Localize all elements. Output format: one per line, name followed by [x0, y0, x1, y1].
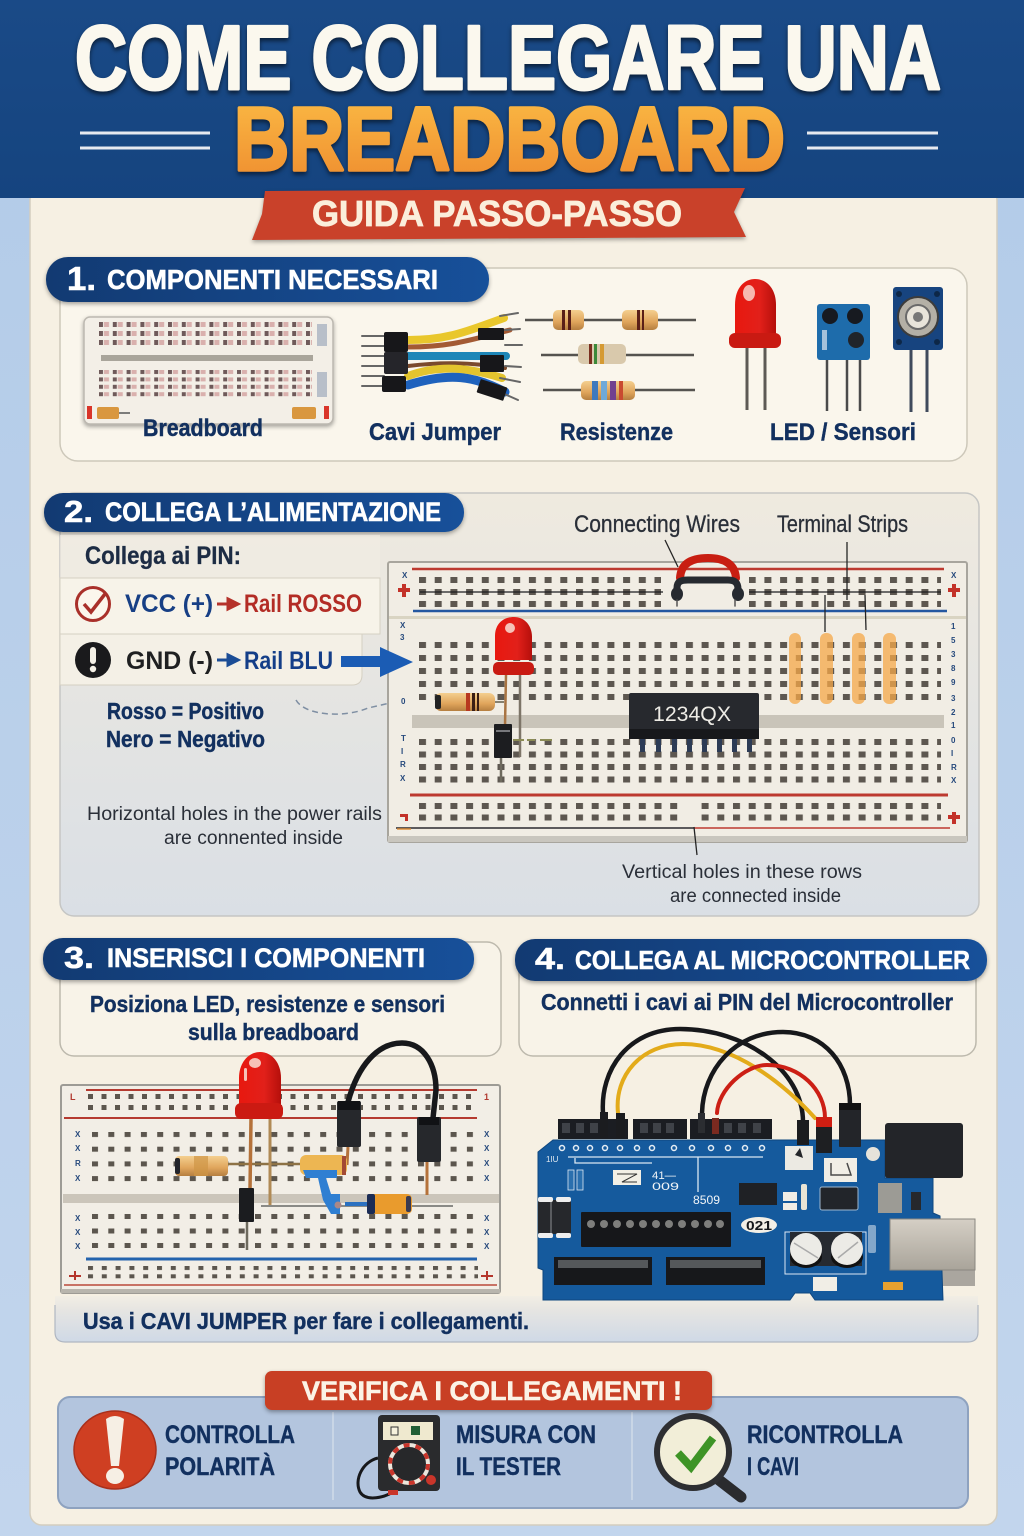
side markers: X: [484, 1242, 490, 1251]
section 3 instruction: Posiziona LED, resistenze e sensori: [90, 991, 445, 1017]
section 4 heading pill: [515, 939, 987, 981]
side labels: X: [951, 776, 957, 785]
icon: sensor module 1: [817, 304, 870, 411]
check 2 text: [456, 1421, 596, 1481]
side labels: 0: [401, 697, 406, 706]
capacitors: [785, 1232, 866, 1274]
icon: exclamation: [74, 1411, 156, 1489]
main chip: [581, 1212, 731, 1247]
side labels: X: [400, 774, 406, 783]
section 4 heading pill: COLLEGA AL MICROCONTROLLER: [575, 945, 970, 975]
side labels: T: [401, 734, 406, 743]
panel: 3 inserisci i componenti: [43, 938, 501, 1056]
VCC row: [125, 590, 362, 618]
GND row: Rail BLU: [244, 647, 333, 675]
section 3 heading pill: 3.: [64, 940, 94, 975]
microcontroller board: [538, 1029, 975, 1300]
left decorative lines: [80, 133, 210, 148]
check 1 text: [165, 1421, 295, 1481]
side labels: 3: [400, 633, 405, 642]
resistor middle: [300, 1155, 347, 1175]
IC label: 1234QX: [653, 703, 731, 726]
black connector on board: [494, 724, 552, 782]
VCC row: Rail ROSSO: [244, 590, 362, 618]
resistor right: [367, 1194, 412, 1214]
resistor left: [175, 1156, 228, 1176]
USB metal shell shadow: [890, 1262, 975, 1286]
rail plus markers: [398, 584, 960, 824]
power block: [885, 1123, 963, 1178]
label: connecting wires: Connecting Wires: [574, 511, 740, 538]
side markers: X: [75, 1214, 81, 1223]
check 3 text: RICONTROLLA: [747, 1421, 903, 1449]
left connector: [538, 1197, 571, 1238]
side markers: X: [484, 1144, 490, 1153]
panel: 1 componenti necessari: [46, 257, 967, 461]
side markers: X: [75, 1242, 81, 1251]
check 3 text: [747, 1421, 903, 1481]
silkscreen labels: 41—: [652, 1170, 676, 1182]
leader lines: [665, 540, 866, 855]
legend text: [106, 698, 265, 752]
side markers: X: [484, 1214, 490, 1223]
verify banner: [265, 1371, 712, 1410]
bottom headers: [554, 1257, 765, 1285]
side labels: X: [402, 571, 408, 580]
label: resistors: Resistenze: [560, 419, 673, 446]
LED on board: [493, 617, 534, 757]
side markers: [69, 1092, 493, 1280]
silkscreen labels: [546, 1155, 720, 1207]
side labels: 1: [951, 622, 956, 631]
check 3 text: I CAVI: [747, 1453, 799, 1481]
connectors: [239, 1101, 441, 1222]
hole row: [560, 1146, 764, 1150]
icon: red and black jumper: [671, 558, 744, 606]
legend text: Nero = Negativo: [106, 726, 265, 752]
VCC row: VCC (+): [125, 590, 213, 618]
side labels: R: [400, 760, 406, 769]
USB port: [890, 1219, 975, 1270]
panel: 4 collega al microcontroller: [515, 939, 987, 1056]
silkscreen labels: 8509: [693, 1193, 720, 1207]
icon: red check: [76, 588, 110, 620]
pin instruction box: [60, 535, 380, 685]
icon: small breadboard: [84, 317, 333, 424]
section 2 heading pill: [44, 493, 464, 532]
LED: [235, 1052, 283, 1119]
check 2 text: MISURA CON: [456, 1421, 596, 1449]
label: jumper wires: Cavi Jumper: [369, 419, 501, 446]
silkscreen labels: 009: [652, 1181, 679, 1193]
side labels: 0: [951, 736, 956, 745]
GND row: [126, 647, 333, 675]
side labels: R: [951, 763, 957, 772]
section 4 instruction: Connetti i cavi ai PIN del Microcontroller: [541, 989, 953, 1015]
header band: [0, 0, 1024, 198]
note: power rails: [87, 804, 382, 849]
label: LED and sensors: LED / Sensori: [770, 419, 916, 446]
side labels: 2: [951, 708, 956, 717]
oval label 021: [741, 1217, 777, 1233]
large breadboard: [388, 540, 967, 855]
check 1 text: CONTROLLA: [165, 1421, 295, 1449]
label: terminal strips: Terminal Strips: [777, 511, 908, 538]
section 2 heading pill: 2.: [64, 494, 93, 529]
icon: magnifier with check: [657, 1416, 741, 1497]
side labels: [400, 571, 957, 785]
top pin headers: [558, 1119, 772, 1139]
arrow: dashed curve: [296, 700, 390, 714]
side labels: I: [951, 749, 953, 758]
side markers: L: [70, 1092, 76, 1102]
icon: black warning: [75, 642, 111, 678]
side markers: X: [484, 1130, 490, 1139]
side markers: 1: [484, 1092, 489, 1102]
wires: [603, 1029, 850, 1122]
label: breadboard: Breadboard: [143, 415, 263, 442]
side labels: I: [401, 747, 403, 756]
side markers: X: [75, 1174, 81, 1183]
icon: jumper wires: [362, 313, 522, 401]
side labels: 3: [951, 694, 956, 703]
subtitle text: GUIDA PASSO-PASSO: [312, 193, 682, 234]
icon: tester: [358, 1415, 440, 1498]
note: vertical holes: are connected inside: [670, 886, 841, 907]
side labels: 5: [951, 636, 956, 645]
breadboard with components: [61, 1043, 500, 1293]
side markers: X: [75, 1144, 81, 1153]
section 1 heading pill: COMPONENTI NECESSARI: [107, 264, 438, 295]
silkscreen lines: [568, 1157, 763, 1192]
subtitle ribbon: [252, 188, 746, 240]
panel: verifica i collegamenti: [58, 1371, 968, 1508]
check 2 text: IL TESTER: [456, 1453, 561, 1481]
check 1 text: POLARITÀ: [165, 1452, 275, 1481]
section 3 heading pill: INSERISCI I COMPONENTI: [107, 943, 425, 973]
icon: LED: [729, 279, 781, 410]
section 3 instruction: [90, 991, 445, 1045]
terminal strip highlights: [789, 633, 896, 704]
section 3 heading pill: [43, 938, 474, 980]
right decorative lines: [807, 133, 938, 148]
note: power rails: are connented inside: [164, 828, 343, 849]
caption strip: Usa i CAVI JUMPER per fare i collegamenti.: [83, 1308, 529, 1334]
panel: 2 collega l'alimentazione: [44, 493, 979, 916]
resistor on board: [435, 693, 504, 711]
pin heading: Collega ai PIN:: [85, 542, 241, 570]
silkscreen labels: 1IU: [546, 1155, 559, 1164]
section 1 heading pill: [46, 257, 489, 302]
side markers: X: [75, 1228, 81, 1237]
wires between components: [228, 1043, 453, 1250]
legend text: Rosso = Positivo: [107, 698, 264, 724]
arrow: blue to breadboard: [341, 647, 413, 677]
blue bracket: [303, 1170, 367, 1214]
GND row: GND (-): [126, 647, 213, 675]
section 2 heading pill: COLLEGA L’ALIMENTAZIONE: [105, 497, 441, 527]
section 3 instruction: sulla breadboard: [188, 1019, 359, 1045]
side labels: 9: [951, 678, 956, 687]
side markers: X: [75, 1130, 81, 1139]
side labels: 3: [951, 650, 956, 659]
note: vertical holes: Vertical holes in these rows: [622, 862, 862, 883]
section 4 heading pill: 4.: [535, 941, 565, 976]
side markers: X: [484, 1174, 490, 1183]
oval label 021: 021: [746, 1218, 772, 1233]
icon: resistors: [525, 310, 696, 400]
icon: sensor module 2: [893, 287, 943, 412]
side labels: X: [951, 571, 957, 580]
jumper connectors: [600, 1103, 861, 1153]
title line 2: BREADBOARD: [234, 90, 785, 190]
note: vertical holes: [622, 862, 862, 907]
side labels: X: [400, 621, 406, 630]
IC chip: [629, 693, 759, 752]
side labels: 1: [951, 721, 956, 730]
side labels: 8: [951, 664, 956, 673]
note: power rails: Horizontal holes in the power rails: [87, 804, 382, 825]
side markers: R: [75, 1159, 81, 1168]
small chip: [739, 1183, 777, 1205]
side markers: X: [484, 1228, 490, 1237]
caption strip: [55, 1296, 978, 1342]
side markers: X: [484, 1159, 490, 1168]
section 1 heading pill: 1.: [67, 260, 96, 297]
verify banner: VERIFICA I COLLEGAMENTI !: [302, 1376, 682, 1406]
small parts: [783, 1146, 921, 1291]
